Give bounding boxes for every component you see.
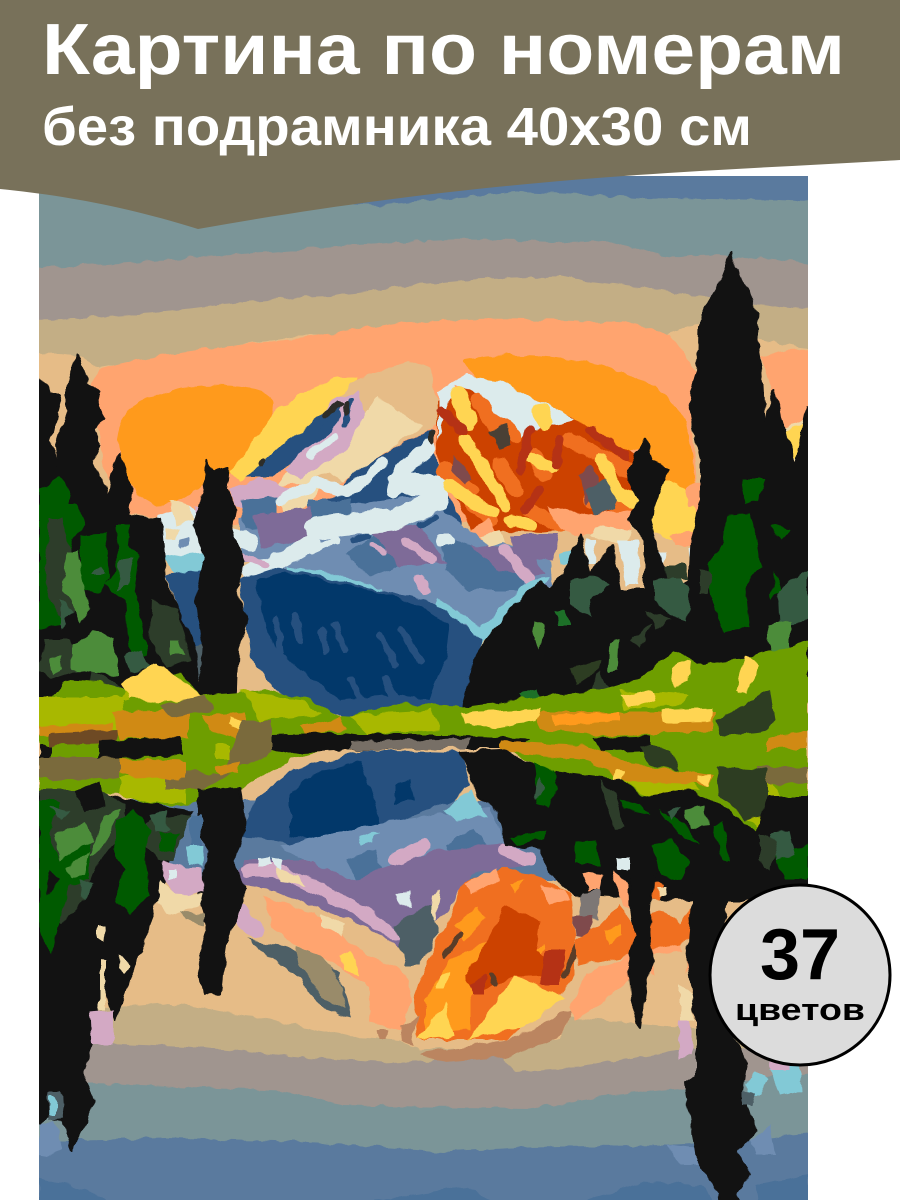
upper tan summit: [316, 361, 438, 484]
aqua edges: [286, 567, 383, 592]
upper left shadow face: [228, 390, 365, 510]
reflected right tree: [685, 890, 756, 1200]
sun-lit orange clouds: [119, 357, 695, 503]
reflection: fiery orange slope: [376, 867, 578, 1062]
second tree: [194, 460, 246, 700]
white snow patch left of the tree: [155, 500, 205, 680]
badge: number of colours: цветов: [735, 992, 865, 1027]
sky colour bands: [39, 176, 808, 881]
subtitle: без подрамника 40х30 см: [42, 97, 752, 157]
reflected right foliage: [510, 765, 808, 880]
lower blue slopes: [240, 495, 552, 640]
right forest foliage: [520, 478, 808, 708]
title: Картина по номерам: [42, 10, 845, 90]
reflection: grey rocks: [246, 940, 350, 1017]
right sunlit face: [436, 383, 639, 533]
reflected left foliage: [39, 782, 190, 1010]
navy lower slope: [239, 567, 482, 718]
left forest foliage: [39, 477, 190, 712]
yellow rim: [229, 377, 358, 482]
reflected dark trees: [628, 870, 756, 1200]
header banner: [0, 0, 900, 229]
reflected right orange peaks: [571, 858, 700, 1058]
white snow strokes: [232, 437, 450, 572]
reflection: blue slope: [237, 750, 507, 880]
lavender strokes: [240, 540, 528, 590]
reflection: lavender rocks: [232, 843, 536, 947]
lower lake colour bands: [15, 880, 835, 1200]
tree silhouettes and dark forest: [20, 252, 835, 705]
badge: number of colours: 37: [760, 915, 840, 995]
badge: number of colours: [710, 885, 890, 1065]
reflected spike: [628, 870, 655, 1028]
mountain: [228, 360, 639, 718]
shore: [39, 640, 808, 833]
right-side aqua patches: [48, 1060, 802, 1120]
far left tree: [39, 354, 199, 697]
painting: mountain lake at sunset: [15, 150, 835, 1200]
reflection: peach slope: [264, 897, 440, 1030]
reflected central tree: [198, 788, 246, 995]
right forest: [463, 252, 835, 705]
reflected forest mass: [20, 750, 835, 1153]
left reflected rocks beside the tree: [90, 815, 204, 1045]
cream snowfield: [275, 397, 421, 517]
distant right snow strips and yellow cloud: [585, 480, 706, 588]
